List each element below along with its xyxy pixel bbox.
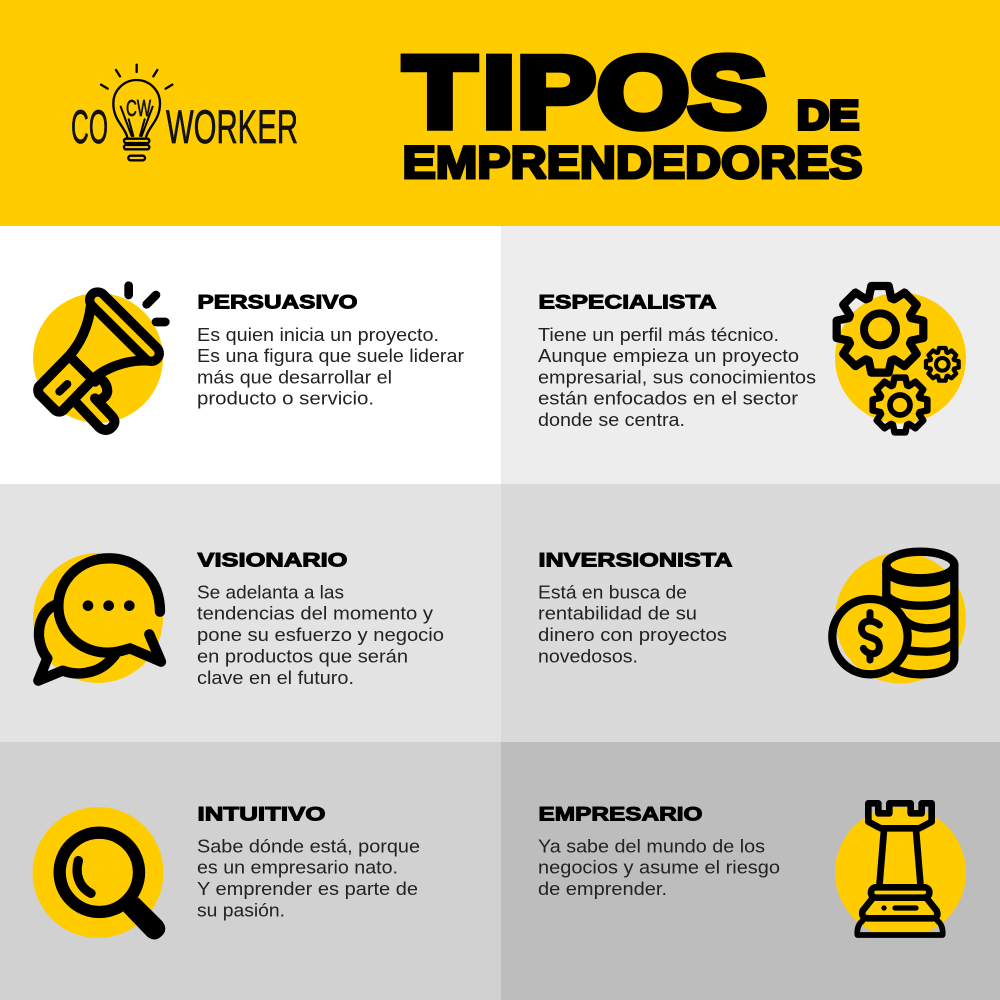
description: clave en el futuro.	[197, 668, 354, 688]
description: Es quien inicia un proyecto.	[197, 325, 439, 345]
description: Y emprender es parte de	[197, 879, 418, 899]
description: su pasión.	[197, 900, 285, 920]
logo text: WORKER	[166, 100, 298, 153]
description	[538, 325, 816, 430]
panel: inversionista	[501, 484, 1000, 742]
description	[197, 325, 464, 408]
panel: intuitivo	[0, 742, 501, 1000]
heading: INVERSIONISTA	[538, 550, 732, 572]
icon: coins	[832, 552, 966, 684]
description: más que desarrollar el	[197, 368, 392, 388]
description: novedosos.	[538, 646, 638, 666]
title	[402, 36, 862, 188]
icon: gears	[835, 286, 966, 432]
header band	[0, 0, 1000, 226]
description: rentabilidad de su	[538, 604, 697, 624]
logo bulb icon	[101, 65, 172, 160]
description: dinero con proyectos	[538, 625, 727, 645]
heading: PERSUASIVO	[198, 292, 358, 314]
description: Está en busca de	[538, 582, 687, 602]
description: donde se centra.	[538, 410, 685, 430]
heading: ESPECIALISTA	[538, 292, 716, 314]
title: EMPRENDEDORES	[402, 137, 862, 188]
heading: INTUITIVO	[198, 804, 326, 826]
description	[197, 582, 444, 688]
description: Sabe dónde está, porque	[197, 836, 420, 856]
description: Es una figura que suele liderar	[197, 346, 464, 366]
description: producto o servicio.	[197, 388, 374, 408]
description: Aunque empieza un proyecto	[538, 346, 799, 366]
heading: VISIONARIO	[198, 550, 348, 572]
heading: EMPRESARIO	[538, 804, 702, 826]
description: están enfocados en el sector	[538, 388, 798, 408]
description: Tiene un perfil más técnico.	[538, 325, 779, 345]
logo text: CW	[126, 95, 151, 121]
panel: persuasivo	[0, 226, 501, 484]
description: pone su esfuerzo y negocio	[197, 625, 444, 645]
description: es un empresario nato.	[197, 858, 398, 878]
logo text: CO	[71, 100, 108, 153]
description: Se adelanta a las	[197, 582, 344, 602]
description	[197, 836, 420, 920]
icon: magnifier	[32, 807, 165, 939]
description: tendencias del momento y	[197, 604, 433, 624]
description: en productos que serán	[197, 646, 408, 666]
description	[538, 582, 727, 666]
panel: especialista	[501, 226, 1000, 484]
panel: visionario	[0, 484, 501, 742]
panel: empresario	[501, 742, 1000, 1000]
description	[538, 836, 780, 899]
logo: coworker	[71, 65, 298, 160]
description: de emprender.	[538, 879, 667, 899]
icon: chess rook	[835, 803, 966, 938]
icon: megaphone	[33, 286, 165, 430]
icon: speech bubbles	[33, 553, 163, 683]
description: Ya sabe del mundo de los	[538, 836, 765, 856]
description: empresarial, sus conocimientos	[538, 368, 816, 388]
description: negocios y asume el riesgo	[538, 858, 780, 878]
logo text	[71, 95, 298, 153]
title: TIPOS	[404, 36, 767, 149]
title: DE	[797, 92, 859, 138]
